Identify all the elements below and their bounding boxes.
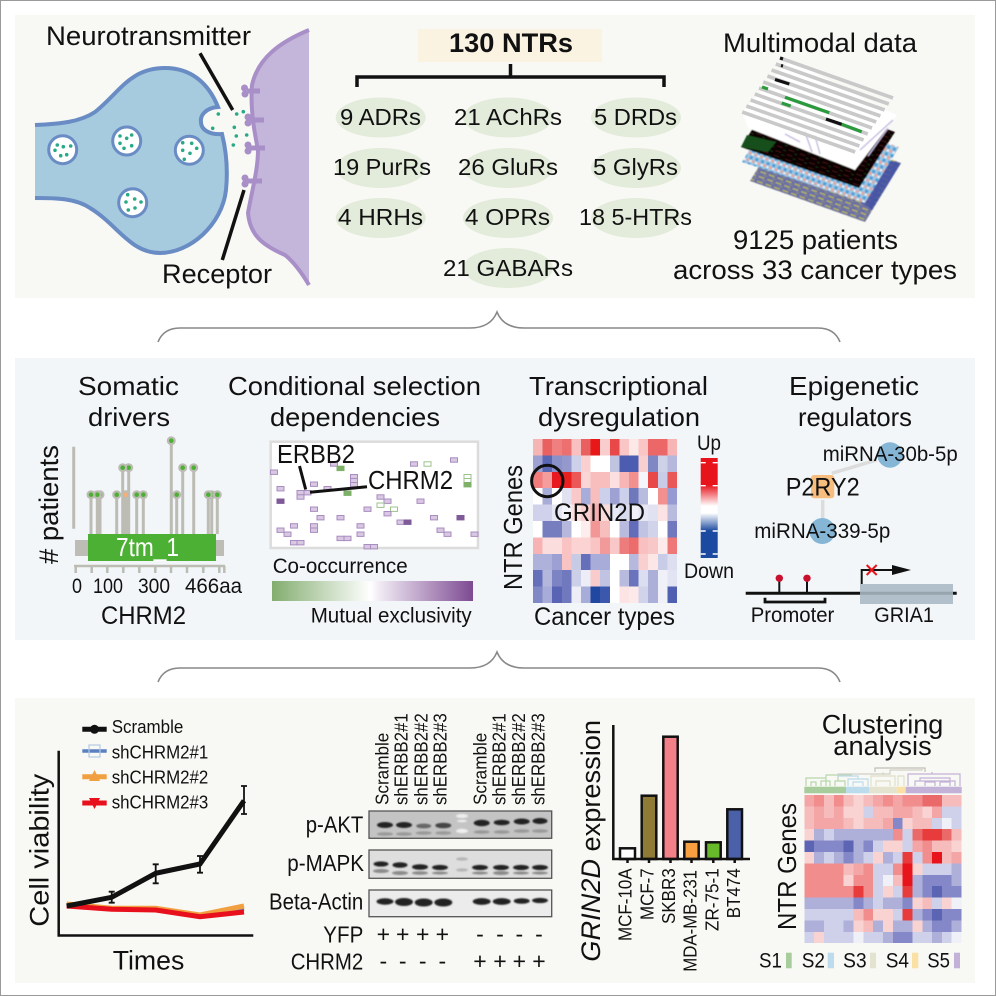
section: somatic drivers: drivers [88,402,170,432]
legend: line series: shCHRM2#3 [112,792,208,812]
legend: subtypes: S3 [843,950,867,973]
chart: western blots: + [473,948,487,974]
chart: lollipop plot CHRM2 [72,437,242,598]
section: conditional selection dependencies: dependencies [270,402,440,432]
chart: western blots: p-AKT [306,812,363,838]
chart: GRIN2D expression bars [576,720,750,972]
chart: cell viability line chart [24,717,253,975]
section: conditional selection dependencies [228,371,481,628]
callout: GRIN2D circle: GRIN2D [554,499,645,527]
network: miRNA regulators of P2RY2: miRNA-30b-5p [823,443,958,466]
chart: western blots: - [535,921,543,947]
chart: western blots: + [532,948,546,974]
chart: western blots: - [496,921,504,947]
chart: western blots: + [513,948,526,974]
chart: western blots: - [515,921,523,947]
legend: subtypes: S2 [802,950,825,973]
legend: line series: shCHRM2#1 [112,742,208,762]
chart: GRIN2D expression bars: MCF-10A [616,868,636,941]
chart: western blots: Beta-Actin [269,888,363,914]
diagram: 130 NTRs classes: 9 ADRs [340,104,421,130]
chart: western blots: + [436,921,449,947]
chart: western blots: shERBB2#2 [411,713,431,805]
section: clustering analysis: NTR Genes [772,803,802,930]
chart: cell viability line chart: Times [113,945,184,975]
graphic: multimodal data layers: 9125 patients [733,225,898,255]
panel: experimental validation [15,698,975,983]
chart: western blots: + [416,921,429,947]
section: transcriptional dysregulation: NTR Genes [498,465,528,590]
chart: co-occurrence matrix: ERBB2 [277,439,355,469]
section: clustering analysis: analysis [833,731,932,761]
section: somatic drivers: # patients [34,445,64,564]
diagram: GRIA1 promoter methylation: GRIA1 [874,604,934,627]
section: transcriptional dysregulation [498,371,734,631]
panel: analyses [15,358,975,640]
icon: receptors [242,85,265,187]
section: conditional selection dependencies: Co-occurrence [273,555,408,578]
section: somatic drivers: Somatic [78,371,179,401]
brace: top to middle [158,312,840,342]
diagram: 130 NTRs classes: 18 5-HTRs [579,204,692,230]
chart: western blots: CHRM2 [291,948,363,974]
chart: GRIN2D expression bars: ZR-75-1 [702,868,722,931]
diagram: 130 NTRs classes: 4 HRHs [338,204,423,230]
chart: western blots: shERBB2#1 [490,713,510,805]
section: transcriptional dysregulation: dysregulation [538,402,700,432]
chart: western blots: shERBB2#3 [431,713,451,805]
chart: western blots: - [399,948,407,974]
chart: GRIN2D expression bars: GRIN2D expression [576,720,606,962]
chart: western blots: Scramble [372,733,392,805]
section: epigenetic regulators: regulators [798,402,912,432]
chart: western blots [269,713,552,974]
diagram: 130 NTRs classes: 130 NTRs [449,28,573,58]
illustration: synapse [35,21,309,289]
legend: line series [82,717,208,812]
network: miRNA regulators of P2RY2: P2RY2 [786,474,860,502]
chart: western blots: + [396,921,409,947]
chart: co-occurrence matrix: CHRM2 [368,465,453,495]
legend: colour bar [272,581,473,601]
legend: subtypes: S5 [927,950,950,973]
graphic: multimodal data layers: across 33 cancer types [673,255,957,285]
section: conditional selection dependencies: Conditional selection [228,371,481,401]
diagram: 130 NTRs classes: 5 GlyRs [593,154,678,180]
section: transcriptional dysregulation: Transcriptional [529,371,708,401]
section: transcriptional dysregulation: Cancer types [534,603,675,631]
chart: western blots: - [476,921,484,947]
network: miRNA regulators of P2RY2 [754,442,958,544]
diagram: 130 NTRs classes: 26 GluRs [458,154,558,180]
chart: western blots: + [493,948,507,974]
cluster colour strip [804,787,962,793]
section: conditional selection dependencies: Mutual exclusivity [311,605,472,628]
chart: western blots: shERBB2#3 [528,713,548,805]
section: epigenetic regulators [746,371,958,627]
section: clustering analysis [759,709,962,973]
diagram: 130 NTRs classes: 21 GABARs [443,255,573,281]
legend: subtypes [759,950,960,973]
callout: GRIN2D circle [532,465,645,527]
chart: lollipop plot CHRM2: 7tm_1 [116,532,179,562]
chart: western blots: - [379,948,387,974]
network: miRNA regulators of P2RY2: miRNA-339-5p [754,520,890,543]
chart: western blots: + [377,921,390,947]
chart: GRIN2D expression bars: BT474 [724,868,744,918]
section: somatic drivers: CHRM2 [101,602,186,630]
diagram: GRIA1 promoter methylation: Promoter [751,604,834,627]
chart: western blots: - [438,948,446,974]
diagram: 130 NTRs classes: 21 AChRs [454,104,562,130]
illustration: synapse: Neurotransmitter [46,21,251,51]
chart: clustering heatmap [804,795,962,943]
chart: western blots: - [419,948,427,974]
section: somatic drivers [34,371,242,630]
graphic: multimodal data layers: Multimodal data [723,28,918,58]
chart: cell viability line chart: Cell viability [24,773,54,927]
dendrogram [806,768,960,786]
graphic: multimodal data layers [673,28,957,285]
legend: up / down colour bar: Down [684,560,734,583]
diagram: 130 NTRs classes: 4 OPRs [465,204,550,230]
chart: GRIN2D expression bars: MCF-7 [637,868,657,920]
chart: lollipop plot CHRM2: 466aa [185,575,242,598]
chart: co-occurrence matrix [270,439,478,549]
section: epigenetic regulators: Epigenetic [789,371,919,401]
illustration: synapse: Receptor [162,259,272,289]
section: clustering analysis: Clustering [822,709,943,739]
chart: western blots: shERBB2#2 [509,713,529,805]
panel: neurotransmitter receptors overview [15,15,975,298]
legend: up / down colour bar [684,432,734,583]
chart: lollipop plot CHRM2: 100 [93,575,123,598]
chart: lollipop plot CHRM2: 0 [72,575,82,598]
legend: subtypes: S4 [886,950,909,973]
brace: middle to bottom [158,652,840,682]
chart: western blots: YFP [323,921,363,947]
legend: line series: shCHRM2#2 [112,767,208,787]
diagram: 130 NTRs classes: 19 PurRs [333,154,431,180]
chart: lollipop plot CHRM2: 300 [138,575,170,598]
diagram: GRIA1 promoter methylation [746,565,957,627]
legend: subtypes: S1 [759,950,782,973]
chart: western blots: shERBB2#1 [392,713,412,805]
diagram: 130 NTRs classes [333,28,692,288]
chart: GRIN2D expression bars: MDA-MB-231 [681,870,701,972]
diagram: 130 NTRs classes: 5 DRDs [594,104,677,130]
legend: up / down colour bar: Up [697,432,721,455]
chart: western blots: p-MAPK [287,850,365,876]
chart: western blots: Scramble [471,733,491,805]
legend: line series: Scramble [112,717,183,737]
chart: GRIN2D expression bars: SKBR3 [659,868,679,924]
chart: expression heatmap [533,439,677,603]
